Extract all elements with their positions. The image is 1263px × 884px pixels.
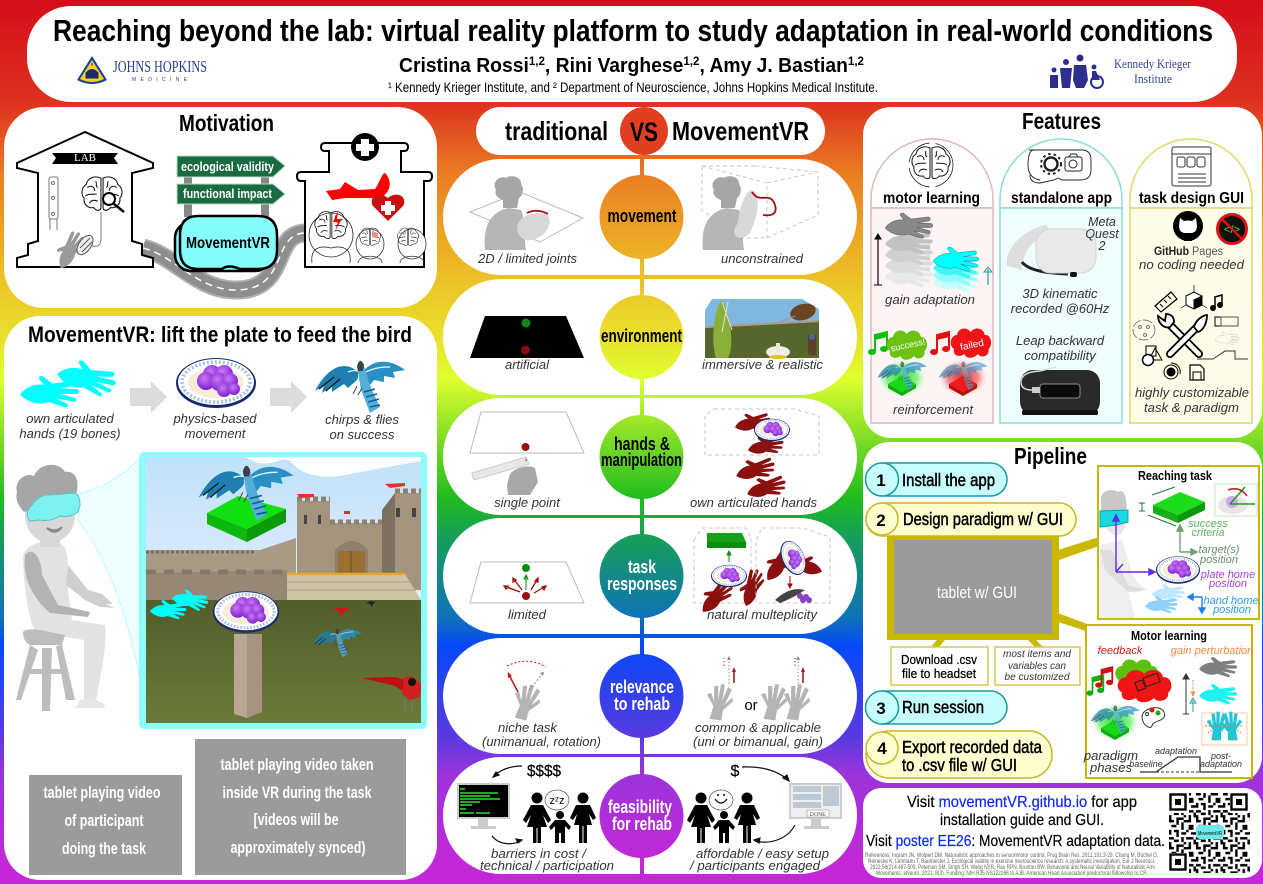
step 4: Export recorded data <box>902 737 1042 757</box>
relevance circle <box>600 654 684 738</box>
panel: movementVR task <box>4 316 437 880</box>
VS circle: VS <box>630 117 658 147</box>
blue bird <box>315 361 405 413</box>
sign: ecological validity <box>177 156 285 177</box>
caption: own articulated hands <box>19 411 121 441</box>
step 2: Design paradigm w/ GUI <box>903 509 1063 529</box>
label: target position <box>1199 544 1240 566</box>
label: target position: target(s) <box>1199 544 1240 556</box>
video placeholder: inside VR: inside VR during the task <box>222 784 372 802</box>
logo: Kennedy Krieger Institute: Kennedy Krieger <box>1114 57 1192 71</box>
label: hand home position: position <box>1212 604 1251 616</box>
panel: features <box>863 107 1262 438</box>
card: standalone app <box>1000 139 1122 423</box>
tablet placeholder <box>887 536 1059 640</box>
inset: reaching task <box>1098 466 1259 619</box>
sign: functional impact: functional impact <box>183 186 273 201</box>
phases trace: adaptation <box>1200 759 1242 769</box>
inset: perturbation directions <box>1202 712 1247 745</box>
caption: 2D / limited joints <box>477 251 577 266</box>
failure feedback <box>930 328 991 398</box>
caption: chirps and flies: on success <box>329 427 395 442</box>
title: standalone app <box>1011 190 1112 207</box>
arrow: GUI to family <box>754 825 795 843</box>
responses circle: task <box>628 557 657 577</box>
box: customizable note <box>995 647 1080 685</box>
cardinal <box>362 676 421 714</box>
row: movement <box>470 166 818 266</box>
label: paradigm phases: phases <box>1089 760 1132 775</box>
caption: chirps and flies: chirps & flies <box>325 412 399 427</box>
box: download csv: file to headset <box>902 666 976 681</box>
video placeholder: participant: of participant <box>64 812 144 830</box>
responses circle: responses <box>607 574 677 594</box>
phases trace: adaptation <box>1155 746 1197 756</box>
row: environment <box>470 295 824 379</box>
authors: Cristina Rossi <box>399 55 533 77</box>
caption: own articulated hands <box>690 495 817 510</box>
step 1 <box>866 463 1007 496</box>
responses circle <box>600 534 684 618</box>
tablet placeholder: tablet w/ GUI <box>937 583 1017 602</box>
gain hands <box>704 656 812 722</box>
panel: motivation <box>4 107 437 308</box>
green feedback bird <box>1089 702 1141 742</box>
arrow: cost to monitor <box>493 766 522 777</box>
references: 2022;56(2):4:487-509. Peterson SM, Singh SH, Wang NXR, Rao RPN, Brunton BW. Behavioral and Neural Variability of Naturalistic Arm <box>870 864 1155 871</box>
label: success criteria <box>1188 518 1228 539</box>
logo: Kennedy Krieger Institute <box>1050 54 1192 88</box>
grass ground <box>146 600 421 723</box>
headset label: MovementVR <box>175 216 277 271</box>
caption: highly customizable <box>1135 385 1249 400</box>
caption: affordable / easy setup <box>696 846 829 861</box>
small cyan hands <box>150 587 210 619</box>
icon: GUI window <box>1172 147 1211 186</box>
customization icon cluster <box>1133 285 1248 380</box>
caption: 3D kinematic <box>1022 286 1098 301</box>
caption: physics-based movement: physics-based <box>172 411 257 426</box>
label: hand home position: hand home <box>1203 595 1259 607</box>
caption: natural multeplicity <box>707 607 819 622</box>
lab building <box>17 132 153 273</box>
sign posts <box>184 177 269 217</box>
inset: motor learning <box>1083 625 1253 778</box>
GitHub Pages label <box>1154 244 1223 258</box>
logo: Kennedy Krieger Institute: Institute <box>1134 72 1172 86</box>
leap controller on headset <box>1020 367 1100 415</box>
GUI monitor: DONE <box>810 812 826 818</box>
video placeholder: participant: doing the task <box>62 840 147 858</box>
caption: reinforcement <box>893 402 974 417</box>
3D dashed volume with arm <box>702 166 818 250</box>
label: Meta Quest 2: 2 <box>1098 239 1106 253</box>
link line 2: installation guide and GUI. <box>940 812 1104 829</box>
caption: immersive & realistic <box>702 357 824 372</box>
step 3: Run session <box>902 697 984 717</box>
heading: motivation: Motivation <box>179 110 274 136</box>
feedback notes and clouds <box>1086 659 1171 702</box>
panel: links and references <box>863 788 1262 878</box>
gray arrow <box>130 381 167 413</box>
affiliations: ¹ Kennedy Krieger Institute, and ² Department of Neuroscience, Johns Hopkins Medical Institute. <box>388 79 878 95</box>
label: plate home position: position <box>1208 578 1247 590</box>
caption: own articulated hands: hands (19 bones) <box>19 426 121 441</box>
cost label: $$$$ <box>527 763 561 780</box>
arrow: cost to GUI <box>742 767 789 781</box>
movement circle: movement <box>608 206 677 226</box>
step 4: to .csv file w/ GUI <box>902 755 1017 775</box>
logo: Johns Hopkins Medicine: JOHNS HOPKINS <box>113 57 207 76</box>
cyan hands <box>20 356 119 407</box>
lab sign: LAB <box>74 152 96 164</box>
video placeholder: inside VR <box>195 739 406 875</box>
label: feedback: feedback <box>1098 645 1143 657</box>
articulated red hands manipulating plate <box>705 409 819 503</box>
GitHub Pages label: Pages <box>1192 244 1223 258</box>
icon: GitHub <box>1173 211 1203 241</box>
title: motor learning <box>883 190 980 207</box>
row: task responses <box>470 528 830 622</box>
2D plane with arm <box>470 176 583 250</box>
caption: common & applicable <box>695 720 821 735</box>
authors: , Amy J. Bastian <box>699 55 848 77</box>
road <box>143 233 305 290</box>
limited responses diagram <box>470 562 584 603</box>
box: download csv: Download .csv <box>901 652 977 667</box>
caption: task & paradigm <box>1144 400 1239 415</box>
pale blue hands <box>1145 584 1185 613</box>
beam from headset to scene <box>78 456 146 720</box>
label: MovementVR: MovementVR <box>672 116 809 146</box>
axes: hand home <box>1188 594 1205 613</box>
label: success criteria: success <box>1188 518 1228 530</box>
environment circle: environment <box>601 326 682 346</box>
phases trace: baseline <box>1129 759 1163 769</box>
row: feasibility <box>458 763 841 873</box>
caption: chirps and flies <box>325 412 399 442</box>
caption <box>689 846 829 873</box>
authors: , Rini Varghese <box>545 55 683 77</box>
relevance circle: relevance <box>610 677 674 697</box>
headset label: MovementVR: MovementVR <box>186 235 270 252</box>
authors: 1,2 <box>529 54 545 68</box>
feasibility circle <box>600 774 684 858</box>
plate <box>1156 556 1200 584</box>
success feedback: success! <box>890 336 926 354</box>
caption <box>1011 286 1110 316</box>
caption: niche task <box>498 720 558 735</box>
video placeholder: inside VR: approximately synced) <box>230 839 366 857</box>
gain perturbation hands <box>1183 657 1237 714</box>
caption: physics-based movement <box>172 411 257 441</box>
arrow: monitor to family <box>492 836 522 844</box>
heading: features: Features <box>1022 108 1101 134</box>
row: hands and manipulation <box>470 409 819 510</box>
label: plate home position <box>1200 569 1255 590</box>
hands circle: hands & <box>614 434 670 454</box>
gray arm hand <box>50 227 88 273</box>
box: customizable note: be customized <box>1004 672 1070 683</box>
caption: (unimanual, rotation) <box>482 734 601 749</box>
sign: ecological validity: ecological validity <box>181 159 275 174</box>
realistic scene thumbnail <box>705 299 819 359</box>
caption <box>482 720 601 749</box>
natural multiplicity scenes <box>694 528 830 618</box>
hospital building <box>297 133 432 267</box>
word: or: or <box>744 697 758 714</box>
phases trace <box>1129 746 1242 772</box>
step 2 <box>866 503 1076 536</box>
logo: Johns Hopkins Medicine <box>77 56 207 84</box>
step 4 <box>866 731 1052 778</box>
axes: target <box>1177 525 1197 555</box>
black screen with targets <box>470 316 584 358</box>
pale person <box>1100 490 1148 618</box>
VR headset <box>27 493 80 521</box>
label: Meta Quest 2: Meta <box>1088 215 1116 229</box>
palette <box>1142 708 1165 727</box>
target plate <box>213 591 279 633</box>
environment circle <box>600 295 684 379</box>
slider apparatus <box>49 177 58 230</box>
authors: 1,2 <box>683 54 700 68</box>
step 4: 4 <box>877 739 887 758</box>
caption <box>1135 385 1249 415</box>
caption: limited <box>508 607 547 622</box>
VS circle <box>620 107 668 155</box>
icon: brain in cycle <box>909 143 953 187</box>
medical cross <box>351 133 379 161</box>
coding monitor <box>458 784 509 829</box>
label: success criteria: criteria <box>1191 527 1225 539</box>
VR scene <box>139 452 427 729</box>
bored family: zᶻz <box>550 795 564 807</box>
flat plane with pointer <box>470 412 584 495</box>
title: Motor learning <box>1131 628 1207 643</box>
heart with cross <box>372 195 404 221</box>
label: target position: position <box>1199 554 1238 566</box>
axes: headset to plate <box>1113 515 1155 575</box>
caption: compatibility <box>1024 348 1097 363</box>
label: Meta Quest 2 <box>1085 215 1119 253</box>
step 1: 1 <box>876 471 886 490</box>
plate with grapes <box>176 358 256 408</box>
GitHub Pages label: GitHub <box>1154 244 1189 258</box>
caption: own articulated hands: own articulated <box>26 411 114 426</box>
heading: pipeline: Pipeline <box>1014 443 1087 469</box>
caption: physics-based movement: movement <box>185 426 247 441</box>
box: customizable note: variables can <box>1008 661 1066 672</box>
authors: 1,2 <box>848 54 864 68</box>
castle <box>146 483 421 600</box>
relevance circle: to rehab <box>614 694 670 714</box>
caption: (uni or bimanual, gain) <box>693 734 823 749</box>
flat plane with pointer: × <box>525 458 528 464</box>
comparison rows <box>443 155 857 874</box>
bored family <box>523 790 596 843</box>
caption: Leap backward <box>1016 333 1105 348</box>
rotation task hand <box>507 661 546 723</box>
stool <box>16 629 75 711</box>
failure feedback: failed <box>959 338 985 353</box>
label: hand home position <box>1203 595 1259 616</box>
heading: lift the plate: MovementVR: lift the plate to feed the bird <box>28 322 412 347</box>
step 3: 3 <box>876 699 886 718</box>
gray arrow <box>270 381 307 413</box>
step 3 <box>866 691 1007 724</box>
patients <box>309 212 426 263</box>
icon: no code <box>1218 214 1246 244</box>
panel: pipeline <box>863 442 1262 783</box>
caption: recorded @60Hz <box>1011 301 1110 316</box>
pillar <box>234 634 262 718</box>
quest headset <box>1007 225 1096 277</box>
icon: headset with gear and camera <box>1028 150 1091 183</box>
label: paradigm phases: paradigm <box>1083 748 1138 763</box>
happy family <box>687 790 760 843</box>
connector lines <box>930 537 1099 648</box>
sign: functional impact <box>177 184 285 204</box>
box: customizable note: most items and <box>1003 649 1071 660</box>
video placeholder: participant: tablet playing video <box>44 784 160 802</box>
lab sign <box>52 152 118 164</box>
label: plate home position: plate home <box>1200 569 1255 581</box>
QR code: MovementVR <box>1198 831 1222 837</box>
step 2: 2 <box>876 511 886 530</box>
label: paradigm phases <box>1083 748 1138 775</box>
hands circle: manipulation <box>601 450 682 470</box>
caption: barriers in cost / <box>491 846 587 861</box>
lightning bolt <box>333 211 342 231</box>
caption: gain adaptation <box>885 292 975 307</box>
caption: technical / participation <box>480 858 614 873</box>
label: traditional: traditional <box>505 116 608 146</box>
video placeholder: inside VR: tablet playing video taken <box>220 756 374 774</box>
large bird <box>199 466 293 521</box>
caption: no coding needed <box>1139 257 1245 272</box>
success feedback <box>868 330 928 398</box>
person wearing headset <box>16 465 114 711</box>
panel: traditional vs MovementVR header <box>476 107 825 155</box>
QR code <box>1169 793 1250 873</box>
muscle <box>74 233 96 257</box>
caption <box>1016 333 1105 363</box>
gain adaptation hands <box>874 213 992 292</box>
link line 1: Visit movementVR.github.io for app <box>907 794 1137 811</box>
caption: single point <box>494 495 561 510</box>
box: download csv <box>891 647 988 685</box>
caption: / participants engaged <box>689 858 821 873</box>
video placeholder: inside VR: [videos will be <box>254 811 338 829</box>
distant birds <box>312 601 376 657</box>
card: task design GUI <box>1130 139 1252 423</box>
feasibility circle: for rehab <box>612 814 672 834</box>
row: relevance to rehab <box>482 654 823 749</box>
inset: rotation criterion <box>1215 484 1257 516</box>
cost label: $ <box>731 763 740 780</box>
video placeholder: participant <box>29 775 182 875</box>
logo: Johns Hopkins Medicine: MEDICINE <box>132 77 188 83</box>
caption <box>693 720 823 749</box>
link line 3: Visit poster EE26: MovementVR adaptation data. <box>866 833 1165 850</box>
references: References: Ingram JN, Wolpert DM. Naturalistic approaches to sensorimotor control. Prog Brain Res. 2011;191:3-29. Chang M, Büchel D, <box>865 852 1158 859</box>
hands circle <box>600 415 684 499</box>
card: motor learning <box>868 139 993 423</box>
references: Reinecke K, Lehmann T, Baumeister J. Ecological validity in exercise neuroscience research: A systematic investigation. Eur J Neurosci. <box>868 858 1155 865</box>
red arm <box>326 173 390 200</box>
label: gain perturbation: gain perturbation <box>1171 645 1253 657</box>
green target <box>207 496 286 542</box>
brain under magnifier <box>82 177 124 246</box>
target box with dimensions <box>1139 487 1205 526</box>
title banner <box>27 6 1237 102</box>
step 1: Install the app <box>902 470 995 490</box>
movement circle <box>600 175 684 259</box>
feasibility circle: feasibility <box>608 797 672 817</box>
GUI monitor <box>790 784 841 829</box>
references <box>865 852 1158 877</box>
caption <box>480 846 614 873</box>
title: Reaching task <box>1138 468 1213 483</box>
caption: unconstrained <box>721 251 804 266</box>
label: Meta Quest 2: Quest <box>1085 227 1119 241</box>
phases trace: post- <box>1210 751 1231 761</box>
title: task design GUI <box>1139 190 1244 207</box>
icon: no code: </> <box>1224 224 1240 236</box>
references: Movements. eNeuro. 2021; 8(3). Funding: NIH R35 NS122266 to AJB. American Heart Association predoctoral fellowship to CR. <box>876 870 1148 877</box>
caption: artificial <box>505 357 550 372</box>
